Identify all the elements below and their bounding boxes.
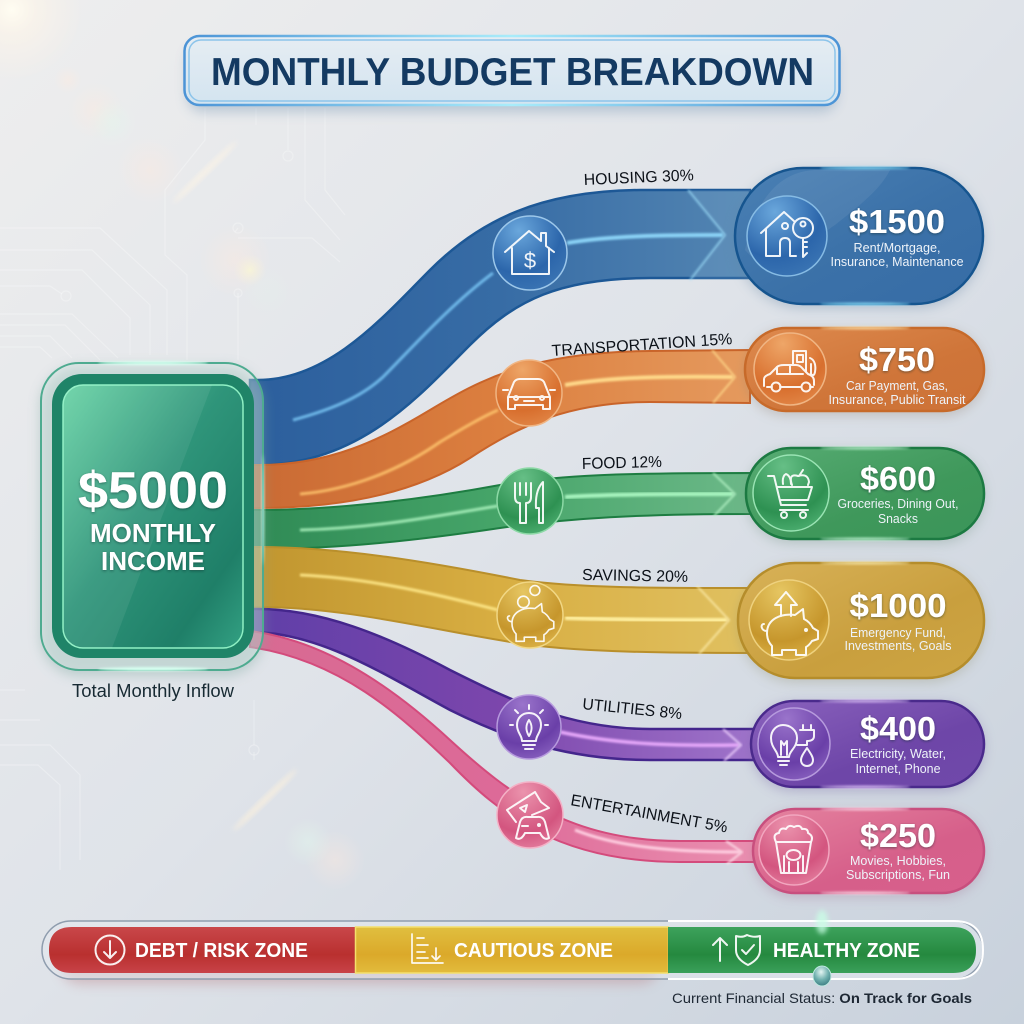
amount and details: Emergency Fund, bbox=[850, 626, 946, 640]
icon: car front bbox=[503, 379, 555, 409]
label: utilities: UTILITIES 8% bbox=[582, 696, 683, 723]
label: food: FOOD 12% bbox=[582, 454, 662, 473]
zone: cautious: CAUTIOUS ZONE bbox=[454, 940, 613, 962]
amount and details bbox=[844, 587, 952, 653]
flow: entertainment bbox=[250, 631, 755, 864]
flow: housing bbox=[250, 190, 750, 465]
zone: debt / risk: DEBT / RISK ZONE bbox=[135, 940, 308, 962]
status marker bbox=[813, 910, 831, 986]
amount and details bbox=[828, 341, 966, 407]
pill: housing bbox=[735, 166, 983, 308]
icon: light bulb bbox=[510, 705, 548, 749]
amount and details bbox=[850, 710, 946, 776]
icon: piggy bank with coins bbox=[508, 586, 554, 641]
panel: monthly income bbox=[40, 361, 264, 676]
amount and details: Insurance, Maintenance bbox=[830, 255, 964, 269]
icon: car and fuel pump bbox=[764, 351, 815, 392]
amount and details: Groceries, Dining Out, bbox=[838, 497, 958, 511]
caption: total monthly inflow: Total Monthly Inflow bbox=[72, 681, 235, 701]
income label: INCOME bbox=[101, 546, 205, 576]
node: entertainment bbox=[497, 782, 563, 848]
icon: house and key bbox=[761, 212, 813, 257]
amount and details bbox=[846, 817, 950, 882]
title text: MONTHLY BUDGET BREAKDOWN bbox=[211, 51, 814, 94]
pill: savings bbox=[738, 562, 984, 682]
amount and details: Subscriptions, Fun bbox=[846, 868, 950, 882]
category labels bbox=[551, 167, 733, 837]
amount and details: Investments, Goals bbox=[844, 639, 952, 653]
amount and details: $250 bbox=[860, 817, 936, 854]
amount and details: $400 bbox=[860, 710, 936, 747]
amount and details: Movies, Hobbies, bbox=[850, 854, 946, 868]
flow: savings bbox=[250, 547, 750, 654]
zone: healthy bbox=[668, 927, 976, 973]
pill: utilities bbox=[751, 700, 984, 791]
label: transportation: TRANSPORTATION 15% bbox=[551, 331, 733, 360]
zone: healthy: HEALTHY ZONE bbox=[773, 940, 920, 962]
amount and details bbox=[830, 203, 964, 269]
flow: utilities bbox=[250, 609, 755, 761]
status caption: Current Financial Status: On Track for Goals bbox=[672, 990, 972, 1006]
pill: transportation bbox=[745, 326, 984, 415]
pill: food bbox=[746, 446, 984, 543]
icon: ticket and game controller bbox=[507, 792, 549, 839]
node: housing bbox=[493, 216, 567, 290]
amount and details: $1000 bbox=[850, 587, 946, 624]
flow: transportation bbox=[250, 350, 750, 508]
node: food bbox=[497, 468, 563, 534]
amount and details: Rent/Mortgage, bbox=[854, 241, 940, 255]
amount and details: Electricity, Water, bbox=[850, 747, 946, 761]
amount and details: Snacks bbox=[878, 512, 918, 526]
zone: debt / risk bbox=[49, 927, 355, 973]
income amount: $5000 bbox=[78, 462, 228, 520]
title banner bbox=[184, 36, 840, 112]
icon: shopping cart with fruit bbox=[768, 470, 812, 518]
node: utilities bbox=[497, 695, 561, 759]
status bar bbox=[42, 910, 983, 986]
icon: popcorn box bbox=[775, 826, 812, 873]
icon: piggy bank with up arrow bbox=[762, 592, 818, 655]
icon: bulb, plug and water drop bbox=[771, 725, 814, 766]
income label: MONTHLY bbox=[90, 518, 216, 548]
label: entertainment: ENTERTAINMENT 5% bbox=[569, 792, 729, 837]
flow: food bbox=[250, 473, 750, 549]
amount and details: $1500 bbox=[849, 203, 945, 240]
income label bbox=[90, 518, 216, 576]
amount and details: Internet, Phone bbox=[856, 762, 941, 776]
amount and details bbox=[838, 460, 958, 526]
node: savings bbox=[497, 582, 563, 648]
amount and details: $750 bbox=[859, 341, 935, 378]
icon: house with dollar: $ bbox=[524, 248, 536, 273]
label: housing: HOUSING 30% bbox=[583, 167, 694, 189]
zone: cautious bbox=[356, 927, 668, 973]
amount and details: Insurance, Public Transit bbox=[828, 393, 966, 407]
amount and details: Car Payment, Gas, bbox=[846, 379, 948, 393]
label: savings: SAVINGS 20% bbox=[582, 567, 688, 586]
node: transportation bbox=[496, 360, 562, 426]
pill: entertainment bbox=[753, 808, 984, 897]
icon: fork and knife bbox=[515, 482, 543, 523]
amount and details: $600 bbox=[860, 460, 936, 497]
